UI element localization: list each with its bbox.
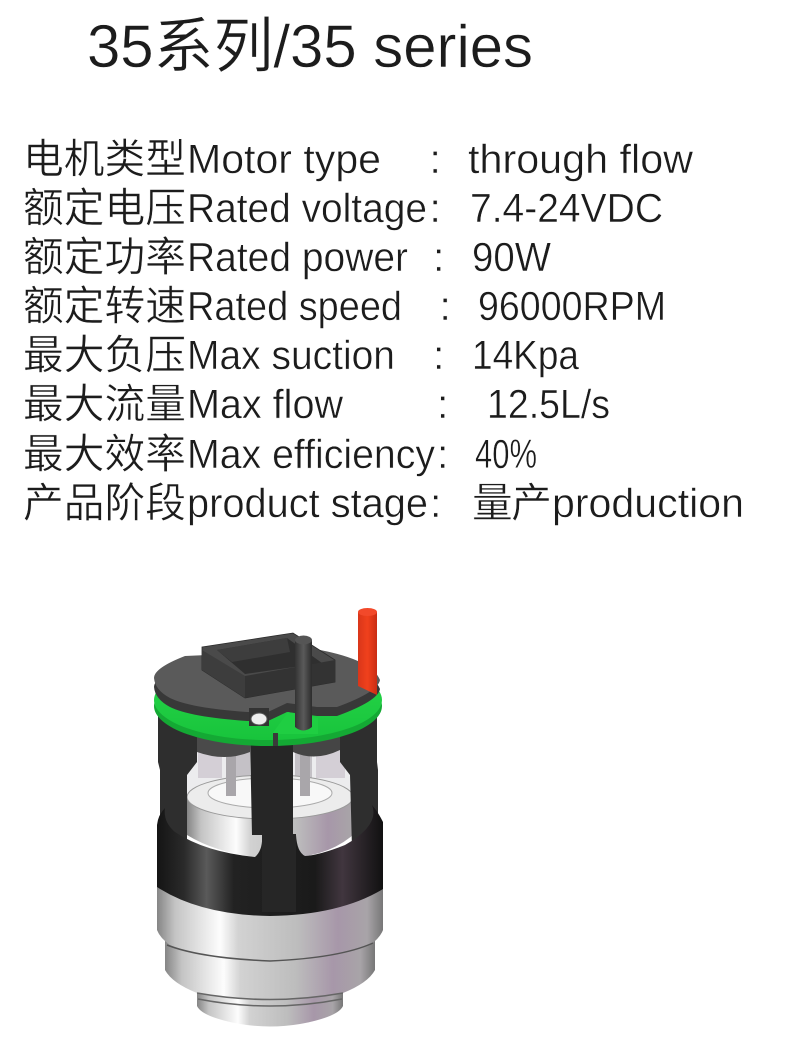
spec: max flow — [23, 381, 610, 427]
spec: rated voltage: 额定电压 — [23, 185, 186, 231]
spec: motor type: through flow — [468, 136, 694, 182]
motor middle silver section — [165, 935, 375, 1000]
spec: rated power: Rated power — [187, 234, 408, 280]
top plate — [154, 633, 380, 734]
spec: product stage: 量产 — [472, 480, 552, 526]
spec: rated speed: : — [440, 283, 451, 329]
ring wedge — [272, 712, 318, 734]
spec: product stage: 产品阶段 — [23, 480, 186, 526]
spec: motor type: : — [430, 136, 441, 182]
motor side legs — [158, 710, 378, 848]
spec: max flow: 12.5L/s — [487, 381, 610, 427]
specification list — [23, 136, 744, 526]
spec: max efficiency: Max efficiency — [187, 431, 436, 477]
icon: square housing — [202, 633, 335, 698]
motor lower lip — [197, 985, 343, 1026]
spec: motor type: Motor type — [187, 136, 381, 182]
spec: product stage: production — [552, 480, 744, 526]
motor upper silver band — [157, 880, 383, 961]
spec: max suction — [23, 332, 579, 378]
spec: max efficiency — [23, 431, 537, 477]
title: 35系列/35 series — [87, 13, 533, 80]
spec: product stage: product stage — [187, 480, 428, 526]
spec: rated speed — [23, 283, 666, 329]
spec: rated speed: 额定转速 — [23, 283, 186, 329]
spec: rated voltage — [23, 185, 663, 231]
motor interior: silver cylinder — [187, 745, 363, 857]
spec: product stage: : — [430, 480, 441, 526]
spec: rated voltage: : — [430, 185, 441, 231]
decorative groove lines — [197, 993, 343, 1006]
spec: rated speed: 96000RPM — [478, 283, 666, 329]
motor black collar — [157, 805, 383, 916]
spec: rated power — [23, 234, 552, 280]
spec: max suction: 14Kpa — [472, 332, 579, 378]
spec: motor type — [23, 136, 694, 182]
spec: rated power: : — [433, 234, 444, 280]
black pin — [295, 636, 312, 730]
spec: rated power: 90W — [472, 234, 552, 280]
ring notch — [273, 733, 278, 746]
spec: max efficiency: : — [437, 431, 448, 477]
spec: rated voltage: Rated voltage — [187, 185, 427, 231]
motor center post — [250, 738, 296, 912]
motor illustration — [154, 608, 383, 1026]
icon: red pin — [358, 608, 377, 695]
spec: rated power: 额定功率 — [23, 234, 186, 280]
spec: max flow: : — [437, 381, 448, 427]
spec: max suction: Max suction — [187, 332, 395, 378]
spec: max efficiency: 40% — [475, 431, 537, 477]
spec: motor type: 电机类型 — [23, 136, 186, 182]
spec: max suction: : — [433, 332, 444, 378]
green ring — [154, 660, 382, 746]
spec: max suction: 最大负压 — [23, 332, 186, 378]
spec: max efficiency: 最大效率 — [23, 431, 186, 477]
spec: rated voltage: 7.4-24VDC — [470, 185, 663, 231]
icon: screw — [249, 708, 269, 726]
spec: max flow: Max flow — [187, 381, 344, 427]
spec: max flow: 最大流量 — [23, 381, 186, 427]
spec: rated speed: Rated speed — [187, 283, 402, 329]
spec: product stage — [23, 480, 744, 526]
